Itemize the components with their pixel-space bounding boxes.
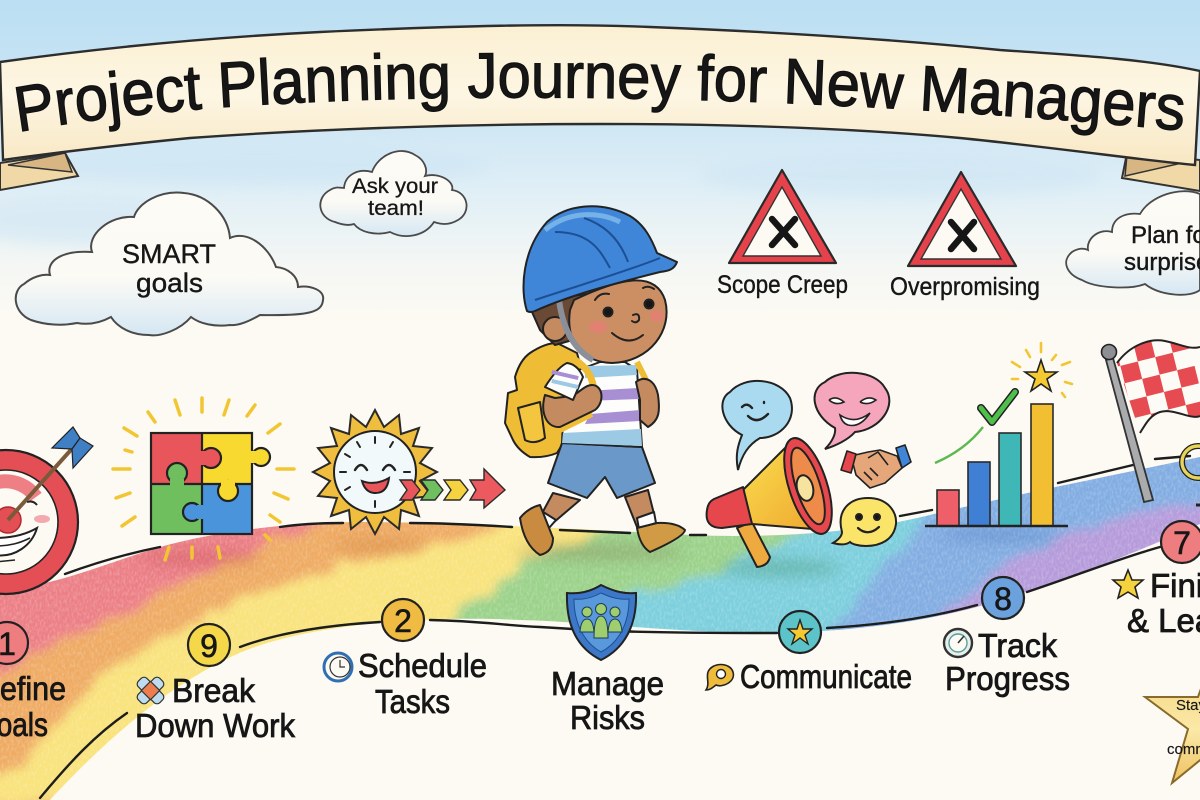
cloud label: goals	[136, 268, 203, 298]
star	[1025, 360, 1057, 391]
label: Down Work	[135, 707, 295, 744]
handle	[737, 522, 770, 567]
road edge lines	[40, 456, 1190, 798]
ground shadows	[140, 529, 1060, 576]
ear	[543, 317, 567, 341]
banner ribbon	[0, 25, 1200, 165]
bell	[774, 433, 842, 539]
cheeks	[589, 321, 607, 333]
speech bubble: yellow smiley	[833, 498, 896, 546]
pole ball	[1102, 344, 1116, 360]
shield icon	[567, 585, 636, 660]
cone	[743, 440, 825, 530]
shorts	[548, 443, 655, 498]
step: communicate	[706, 611, 912, 695]
check mark	[981, 392, 1015, 422]
chin strap	[559, 300, 593, 360]
puzzle outline and seams	[151, 433, 252, 534]
cloud: Plan for surprises	[1066, 191, 1200, 295]
puzzle tabs	[167, 448, 270, 521]
small icon: clock	[324, 653, 352, 681]
rainbow road	[0, 430, 1200, 800]
green trend line	[935, 427, 983, 463]
pole	[1106, 358, 1153, 502]
icon: smiling sun clock	[313, 410, 437, 534]
star rays	[1012, 343, 1072, 397]
small star icon	[1113, 570, 1143, 598]
legs	[540, 493, 580, 523]
backpack	[505, 343, 590, 457]
flag cloth	[1117, 342, 1200, 418]
label: Overpromising	[890, 273, 1040, 301]
number badge	[382, 599, 424, 641]
label: Schedule	[358, 647, 487, 684]
step 8: track progress: 8	[994, 581, 1012, 617]
title text: Project Planning Journey for New Managers	[16, 52, 1184, 136]
warning sign: Scope Creep	[717, 170, 848, 299]
label: Progress	[945, 660, 1070, 697]
piece: blue	[202, 484, 252, 534]
arrow: coloured chevrons	[400, 469, 505, 508]
X mark	[951, 222, 974, 249]
label: Tasks	[375, 683, 450, 720]
step 1: define goals	[0, 622, 66, 743]
cloud: Ask your team	[320, 151, 467, 236]
boy character walking	[505, 206, 685, 555]
label: Risks	[570, 699, 645, 736]
banner tail right	[1122, 153, 1200, 191]
label: Manage	[551, 665, 664, 702]
step 7: finish and learn: 7	[1173, 525, 1191, 561]
number badge	[0, 622, 28, 664]
label: Break	[172, 672, 255, 709]
X mark	[772, 219, 795, 245]
face	[569, 280, 667, 363]
people on shield	[580, 604, 622, 638]
big gold star tip	[1145, 650, 1200, 783]
step 2: schedule tasks: 2	[394, 603, 412, 639]
left arm	[543, 385, 601, 427]
tab necks	[170, 451, 256, 519]
small icon: puzzle pieces	[136, 676, 165, 705]
piece: red	[151, 433, 202, 484]
piece: yellow	[202, 433, 252, 484]
star badge	[779, 611, 821, 653]
backpack straps	[552, 362, 648, 434]
rays	[113, 398, 294, 560]
crayon grain	[0, 440, 1200, 800]
warning sign: Overpromising	[890, 172, 1040, 301]
chart baseline	[925, 525, 1068, 527]
small icon: speech bubble	[706, 664, 733, 690]
arrow	[8, 442, 78, 520]
icon: trophy fragment	[1182, 446, 1200, 505]
shirt	[562, 362, 642, 447]
small icon: gauge	[944, 629, 972, 657]
label: Scope Creep	[717, 271, 848, 299]
label: Communicate	[740, 658, 912, 695]
title banner	[0, 24, 1200, 192]
step 7: finish and learn	[1113, 521, 1200, 639]
helmet	[524, 206, 677, 312]
cloud label: Ask your	[352, 175, 438, 198]
shoes	[520, 505, 553, 555]
eyes	[604, 308, 612, 316]
piece: green	[151, 484, 202, 534]
number badge	[188, 624, 230, 666]
number badge	[982, 577, 1024, 619]
right arm	[636, 379, 659, 427]
step: break down work	[135, 624, 295, 744]
cloud label: team!	[368, 197, 424, 220]
icon: target with arrow	[0, 427, 93, 594]
label: Track	[978, 627, 1057, 664]
banner tail left	[0, 153, 78, 190]
step: manage risks	[551, 585, 664, 736]
number badge	[1161, 521, 1200, 563]
cloud: SMART goals	[16, 193, 323, 335]
brows, nose and smile	[595, 287, 654, 341]
bars	[937, 404, 1053, 526]
step 2: schedule tasks	[324, 599, 487, 720]
bar chart with star	[925, 343, 1072, 526]
sleeve	[545, 363, 583, 400]
speech bubble: pink	[815, 373, 889, 449]
step 8: track progress	[944, 577, 1070, 697]
icon: puzzle with rays	[113, 398, 294, 560]
back	[707, 487, 752, 528]
socks	[538, 510, 556, 528]
checkered finish flag	[1099, 331, 1200, 502]
megaphone	[707, 433, 842, 567]
step: break down work: 9	[200, 628, 218, 664]
speech bubble: blue	[722, 381, 792, 470]
cloud label: SMART	[122, 239, 216, 269]
icon: handshake	[841, 445, 911, 488]
hair	[532, 294, 605, 345]
